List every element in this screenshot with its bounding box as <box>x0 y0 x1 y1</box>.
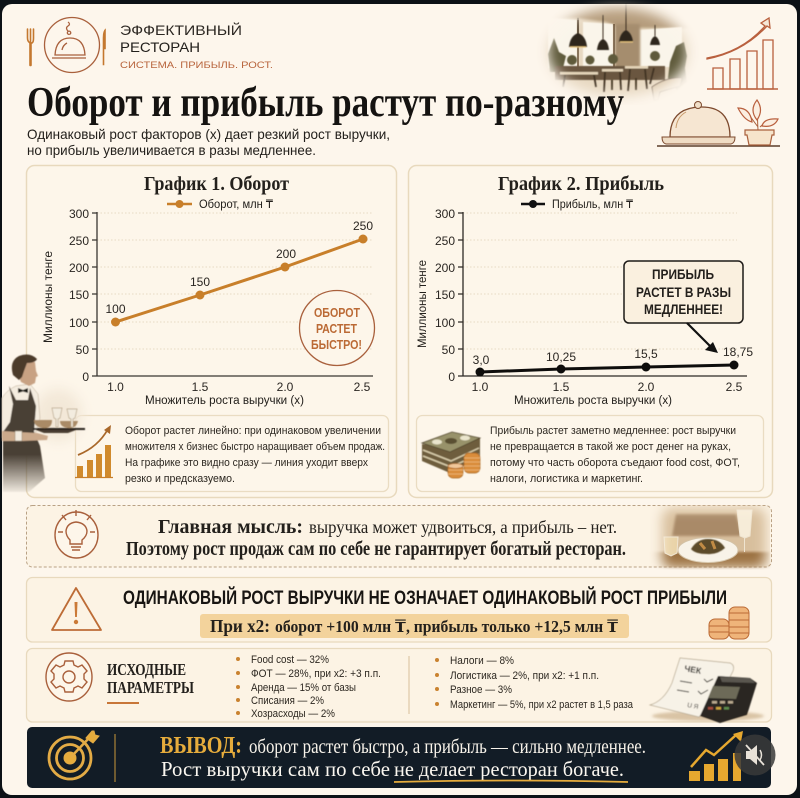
line chart: turnover: 200 <box>276 247 296 261</box>
icon: gear <box>46 653 92 701</box>
text block: profit explanation: Прибыль растет заметно медленнее: рост выручки <box>490 425 736 437</box>
legend: profit <box>521 199 634 211</box>
callout: turnover grows fast: ОБОРОТ <box>314 305 360 320</box>
line chart: turnover: 2.5 <box>354 380 371 394</box>
text block: turnover explanation: множителя х бизнес быстро наращивает объем продаж. <box>125 441 385 453</box>
line chart: turnover: 50 <box>76 343 89 357</box>
text: conclusion <box>160 733 646 782</box>
heading: chart 1: График 1. Оборот <box>144 173 289 195</box>
line chart: profit: 10,25 <box>546 350 576 364</box>
icon: coin stacks <box>709 607 749 639</box>
panel: main idea <box>26 505 772 568</box>
icon: gold growth chart <box>689 731 743 781</box>
subtitle: Одинаковый рост факторов (x) дает резкий рост выручки, <box>27 126 390 142</box>
icon: cloche and plant <box>657 100 780 146</box>
line chart: profit: 3,0 <box>473 353 490 367</box>
callout: profit grows slower: ПРИБЫЛЬ <box>652 266 714 282</box>
text block: turnover explanation: резко и предсказуемо. <box>125 473 235 485</box>
legend: turnover <box>167 199 274 211</box>
line chart: profit: 0 <box>448 370 455 384</box>
list: parameters left: Хозрасходы — 2% <box>251 708 335 720</box>
list: parameters left: ФОТ — 28%, при х2: +3 п.п. <box>251 668 381 680</box>
legend: profit: Прибыль, млн ₸ <box>552 199 634 211</box>
icon: money and coins <box>422 432 480 478</box>
illustration: waiter <box>2 355 85 492</box>
line chart: profit: 1.5 <box>553 380 570 394</box>
line chart: turnover: 100 <box>105 302 126 316</box>
line chart: turnover: 2.0 <box>277 380 294 394</box>
heading: chart 2: График 2. Прибыль <box>498 173 664 195</box>
line chart: turnover: 1.0 <box>107 380 124 394</box>
line chart: turnover: Множитель роста выручки (х) <box>145 395 304 407</box>
list: parameters right <box>435 655 634 711</box>
text: main idea <box>126 516 626 560</box>
line chart: profit: 2.5 <box>726 380 743 394</box>
illustration: receipt and terminal <box>650 658 764 723</box>
highlight: at x2: При х2: <box>210 616 270 636</box>
icon: fork <box>28 29 34 65</box>
arrow: callout to last point <box>687 323 718 353</box>
callout: turnover grows fast: БЫСТРО! <box>311 337 362 352</box>
line chart: turnover: 150 <box>69 288 89 302</box>
line chart: profit: 300 <box>435 207 455 221</box>
icon: cloche in circle <box>44 18 100 72</box>
line chart: profit: 200 <box>435 261 455 275</box>
illustration: receipt and terminal: U Я <box>687 702 699 711</box>
subtitle <box>27 126 390 158</box>
callout: profit grows slower: МЕДЛЕННЕЕ! <box>644 301 723 317</box>
icon: target with arrow <box>49 731 99 779</box>
line chart: profit: 150 <box>435 288 455 302</box>
legend: turnover: Оборот, млн ₸ <box>199 199 274 211</box>
icon: light bulb <box>55 510 98 558</box>
icon: growth chart <box>707 18 778 89</box>
line chart: turnover: 0 <box>82 370 89 384</box>
brand name: ЭФФЕКТИВНЫЙ <box>120 21 242 38</box>
list: parameters right: Разное — 3% <box>450 684 512 696</box>
list: parameters left: Аренда — 15% от базы <box>251 682 356 694</box>
line chart: turnover: Миллионы тенге <box>43 251 55 343</box>
illustration: restaurant interior <box>544 0 692 101</box>
panel: profit chart <box>26 166 776 788</box>
heading: parameters: ИСХОДНЫЕ <box>107 660 186 679</box>
line chart: profit: 15,5 <box>634 347 658 361</box>
brand name: РЕСТОРАН <box>120 39 200 55</box>
callout: profit grows slower: РАСТЕТ В РАЗЫ <box>636 284 731 300</box>
line chart: turnover: 300 <box>69 207 89 221</box>
line chart: turnover: 250 <box>69 234 89 248</box>
brand name: СИСТЕМА. ПРИБЫЛЬ. РОСТ. <box>120 60 273 71</box>
title: Оборот и прибыль растут по-разному <box>27 80 624 126</box>
text: main idea: Главная мысль: <box>158 516 303 538</box>
line chart: profit: 1.0 <box>472 380 489 394</box>
illustration: plated dish <box>650 505 770 568</box>
text: main idea: Поэтому рост продаж сам по себе не гарантирует богатый ресторан. <box>126 539 626 560</box>
text block: turnover explanation: Оборот растет линейно: при одинаковом увеличении <box>125 425 381 437</box>
line chart: turnover: 250 <box>353 219 373 233</box>
line chart: turnover: 150 <box>190 275 210 289</box>
heading: parameters <box>107 660 194 703</box>
icon: orange bars with arrow <box>75 425 113 478</box>
text: conclusion: ВЫВОД: <box>160 733 242 759</box>
icon: knife <box>103 29 106 65</box>
line chart: profit: 18,75 <box>723 345 753 359</box>
line chart: turnover: 100 <box>69 316 89 330</box>
line chart: profit: Множитель роста выручки (х) <box>514 395 672 407</box>
heading: parameters: ПАРАМЕТРЫ <box>107 678 194 697</box>
text: conclusion: Рост выручки сам по себе <box>161 757 390 781</box>
line chart: profit: Миллионы тенге <box>417 260 429 348</box>
text block: profit explanation: не превращается в такой же рост денег на руках, <box>490 441 731 453</box>
text: conclusion: оборот растет быстро, а прибыль — сильно медленнее. <box>249 737 646 758</box>
callout: profit grows slower <box>624 261 743 323</box>
line chart: profit <box>417 207 753 407</box>
banner: conclusion <box>27 727 771 788</box>
panel: initial parameters <box>26 648 772 723</box>
panel: turnover chart <box>26 166 396 498</box>
line chart: turnover: 1.5 <box>192 380 209 394</box>
callout: turnover grows fast: РАСТЕТ <box>316 321 357 336</box>
highlight: at x2 <box>200 614 629 638</box>
line chart: turnover: 200 <box>69 261 89 275</box>
line chart: turnover <box>43 207 373 407</box>
list: parameters right: Маркетинг — 5%, при х2 растет в 1,5 раза <box>450 699 634 711</box>
subtitle: но прибыль увеличивается в разы медленнее. <box>27 142 316 158</box>
line chart: profit: 250 <box>435 234 455 248</box>
list: parameters left: Food cost — 32% <box>251 654 329 666</box>
panel: same growth warning <box>26 578 772 642</box>
callout: turnover grows fast <box>300 290 374 366</box>
list: parameters left <box>236 654 381 720</box>
text block: profit explanation: налоги, логистика и маркетинг. <box>490 473 643 485</box>
text block: turnover explanation: На графике это видно сразу — линия уходит вверх <box>125 457 368 469</box>
video mute button <box>734 734 776 776</box>
text: conclusion: не делает ресторан богаче. <box>394 757 624 781</box>
text block: turnover explanation <box>76 416 388 492</box>
highlight: at x2: оборот +100 млн ₸, прибыль только +12,5 млн ₸ <box>275 617 618 636</box>
text block: profit explanation: потому что часть оборота съедают food cost, ФОТ, <box>490 457 740 469</box>
list: parameters right: Логистика — 2%, при х2: +1 п.п. <box>450 670 599 682</box>
line chart: profit: 100 <box>435 316 455 330</box>
list: parameters right: Налоги — 8% <box>450 655 514 667</box>
line chart: profit: 2.0 <box>638 380 655 394</box>
brand name <box>120 21 273 71</box>
text block: profit explanation <box>416 416 764 492</box>
text: main idea: выручка может удвоиться, а прибыль – нет. <box>309 517 617 537</box>
line chart: profit: 50 <box>442 343 455 357</box>
list: parameters left: Списания — 2% <box>251 695 324 707</box>
illustration: receipt and terminal: ЧЕК <box>684 663 703 676</box>
logo <box>28 18 273 72</box>
icon: warning triangle <box>52 588 101 630</box>
